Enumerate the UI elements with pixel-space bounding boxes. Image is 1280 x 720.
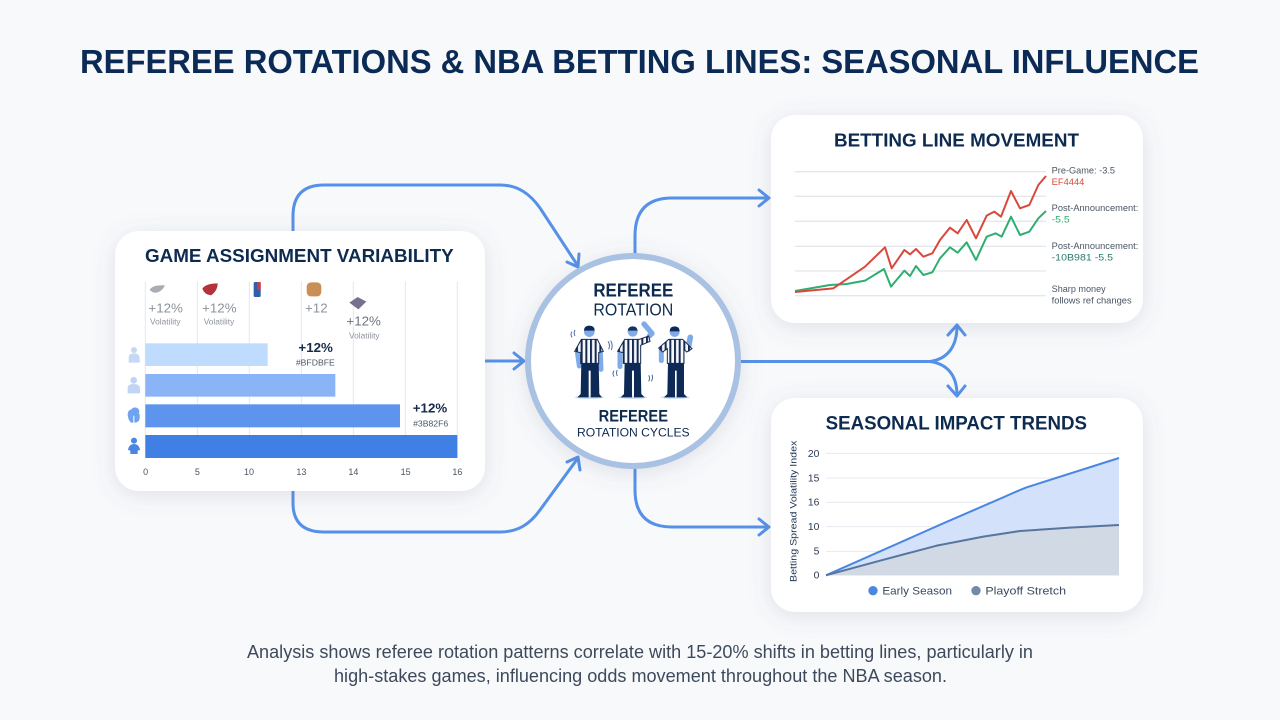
title: REFEREE ROTATIONS & NBA BETTING LINES: SEASONAL INFLUENCE	[80, 44, 1199, 81]
icon: basketball logo	[307, 282, 321, 296]
heading: SEASONAL IMPACT TRENDS	[826, 413, 1087, 434]
legend: Early Season	[882, 586, 952, 598]
volatility labels: +12%	[202, 300, 237, 315]
annotation: sharp money: follows ref changes	[1052, 295, 1132, 305]
y axis labels: 16	[808, 498, 820, 509]
area chart: playoff stretch	[826, 525, 1119, 575]
summary text: Analysis shows referee rotation patterns correlate with 15-20% shifts in betting lines, particularly in	[247, 642, 1033, 662]
icon: person 1	[129, 347, 140, 363]
icon: referee middle	[613, 324, 653, 399]
annotation: post-announcement code: -10B981 -5.5	[1052, 253, 1113, 263]
arrow: assignment panel to rotation hub	[485, 353, 524, 369]
axis labels: 14	[348, 467, 358, 477]
bar callout: light bar: +12%	[298, 340, 333, 355]
annotation: sharp money: Sharp money	[1052, 284, 1106, 294]
panel contents	[795, 129, 1138, 305]
annotation: post-announcement	[1052, 203, 1138, 225]
heading: BETTING LINE MOVEMENT	[834, 129, 1080, 150]
icon: purple team logo	[349, 297, 366, 309]
annotation: pre-game: Pre-Game: -3.5	[1052, 165, 1115, 175]
legend: Playoff Stretch	[985, 586, 1066, 598]
panel contents	[789, 413, 1119, 598]
icon: person 2	[128, 377, 140, 393]
y axis title: Betting Spread Volatility Index	[789, 440, 799, 582]
volatility labels: +12	[305, 300, 328, 315]
hub caption	[577, 407, 690, 439]
icon: referee right	[659, 326, 692, 399]
volatility labels: +12%	[148, 300, 183, 315]
hub heading: REFEREE	[593, 279, 673, 300]
volatility labels: Volatility	[349, 330, 380, 340]
hub heading: ROTATION	[593, 300, 673, 320]
heading: GAME ASSIGNMENT VARIABILITY	[145, 245, 454, 266]
bar chart	[145, 343, 457, 458]
legend	[868, 586, 1066, 598]
volatility labels: Volatility	[204, 317, 235, 327]
bar callout: blue bar: +12%	[413, 401, 447, 416]
panel: seasonal impact trends	[771, 398, 1143, 612]
icon: league logo	[254, 282, 261, 297]
volatility labels: Volatility	[150, 317, 181, 327]
line chart: red pre-game series	[795, 176, 1046, 292]
hub caption: ROTATION CYCLES	[577, 425, 690, 439]
line chart: green post-announcement series	[795, 211, 1046, 291]
y axis labels: 10	[808, 522, 820, 533]
bar callout: blue bar: #3B82F6	[413, 419, 448, 429]
y axis labels: 15	[808, 473, 820, 484]
hub heading	[593, 279, 673, 320]
panel: game assignment variability	[115, 231, 485, 491]
area chart: early season	[826, 458, 1119, 575]
panel: betting line movement	[771, 115, 1143, 323]
annotation: post-announcement: -5.5	[1052, 215, 1070, 225]
arrow: rotation hub to betting line movement	[635, 190, 769, 254]
axis labels: 10	[244, 467, 254, 477]
arrow: rotation hub to seasonal trends	[635, 470, 769, 535]
annotation: pre-game: EF4444	[1052, 177, 1084, 187]
volatility labels: +12%	[346, 313, 381, 328]
axis labels: 16	[452, 467, 462, 477]
connector arrows	[293, 185, 965, 535]
panel contents	[128, 245, 462, 477]
icon: grey team logo	[150, 285, 165, 293]
y axis labels: 5	[814, 546, 820, 557]
arrow: assignment panel over the top to rotation hub	[293, 185, 579, 267]
annotation: post-announcement code: Post-Announcement:	[1052, 241, 1138, 251]
y axis labels: 20	[808, 449, 820, 460]
annotation: sharp money	[1052, 284, 1132, 305]
hub contents	[571, 279, 692, 439]
annotation: post-announcement: Post-Announcement:	[1052, 203, 1138, 213]
icon: person 4	[128, 438, 140, 454]
icon: red team logo	[202, 283, 218, 295]
central hub: referee rotation	[528, 256, 738, 466]
axis labels: 0	[143, 467, 148, 477]
icon: person 3	[128, 407, 140, 423]
axis labels: 13	[296, 467, 306, 477]
arrow: assignment panel underneath to rotation hub	[293, 457, 580, 532]
arrow: hub forks to both right panels	[741, 325, 965, 396]
axis labels: 15	[401, 467, 411, 477]
bar callout: light bar	[296, 340, 335, 367]
summary text: high-stakes games, influencing odds movement throughout the NBA season.	[334, 666, 947, 686]
summary text	[247, 642, 1033, 686]
axis labels: 5	[195, 467, 200, 477]
y axis labels: 0	[814, 570, 820, 581]
bar callout: light bar: #BFDBFE	[296, 357, 335, 367]
y axis labels	[808, 449, 820, 581]
hub caption: REFEREE	[599, 407, 668, 426]
axis labels	[143, 467, 462, 477]
icon: referee left	[571, 326, 612, 399]
volatility labels	[148, 300, 381, 340]
bar callout: blue bar	[413, 401, 448, 429]
annotation: post-announcement code	[1052, 241, 1138, 263]
annotation: pre-game	[1052, 165, 1115, 187]
